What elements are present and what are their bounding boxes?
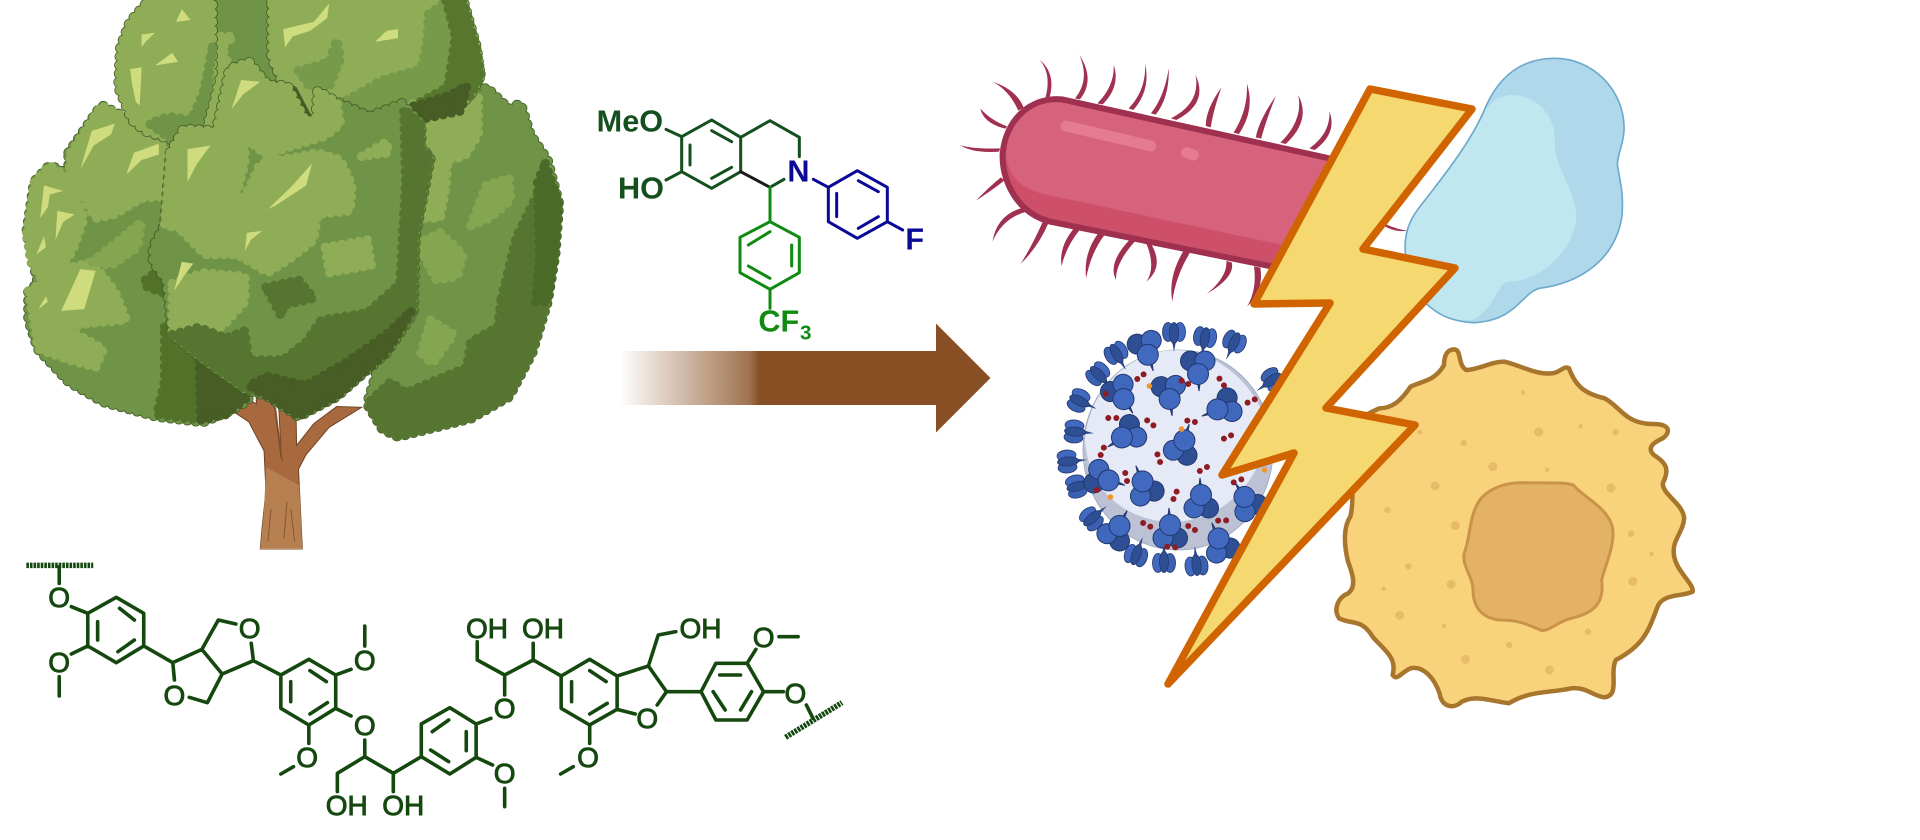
rim spikes <box>1057 322 1287 576</box>
green CF3 phenyl ring: 3 <box>800 321 811 344</box>
lignin atom labels: O <box>785 678 806 709</box>
lignin atom labels: O <box>239 613 260 644</box>
canopy: top middle mass <box>203 0 306 124</box>
chemical structure: lignin polymer <box>26 565 842 821</box>
lignin atom labels: OH <box>382 790 424 821</box>
lignin atom labels: O <box>354 645 376 676</box>
lignin atom labels: O <box>494 693 516 724</box>
lignin atom labels: O <box>296 742 318 773</box>
nucleus <box>1464 483 1613 631</box>
flagella <box>960 55 1408 307</box>
dark green isoquinoline core: HO <box>618 171 664 205</box>
illustration: tree <box>27 0 559 557</box>
blue fluorophenyl ring: F <box>905 222 924 256</box>
illustration: virus <box>1057 322 1287 576</box>
lignin atom labels: OH <box>326 790 368 821</box>
canopy: front mass <box>153 62 431 416</box>
lignin atom labels: O <box>354 710 376 741</box>
lignin atom labels: O <box>494 758 516 789</box>
chemical structure: tetrahydroisoquinoline compound <box>597 105 924 344</box>
illustration: cancer cell <box>1308 349 1693 706</box>
blue fluorophenyl ring: N <box>787 155 809 189</box>
arrow <box>620 324 990 432</box>
lignin atom labels: O <box>636 703 658 734</box>
cell body <box>1003 99 1352 270</box>
green CF3 phenyl ring <box>740 187 811 344</box>
lignin atom labels: O <box>48 647 70 678</box>
virus envelope <box>1083 350 1273 550</box>
illustration: fungal cell <box>1405 58 1624 323</box>
organelles <box>1384 393 1652 670</box>
illustration: bacterium <box>960 55 1408 307</box>
canopy: top left mass <box>119 0 212 140</box>
lignin atom labels: O <box>164 680 185 711</box>
canopy: left mass <box>27 105 249 422</box>
canopy: top right mass <box>272 0 481 122</box>
dark green isoquinoline core <box>597 105 799 205</box>
inner highlight <box>1405 95 1576 320</box>
green CF3 phenyl ring: CF <box>758 305 799 339</box>
cell membrane <box>1308 349 1693 706</box>
blue fluorophenyl ring <box>787 155 924 256</box>
lignin atom labels: OH <box>680 613 722 644</box>
red and orange particles <box>1097 374 1265 547</box>
trunk <box>230 375 362 557</box>
lignin atom labels: O <box>48 582 70 613</box>
lignin atom labels: O <box>577 742 599 773</box>
lightning bolt <box>1168 89 1472 684</box>
lignin atom labels <box>48 582 806 821</box>
lignin atom labels: OH <box>466 613 508 644</box>
lignin atom labels: OH <box>522 613 564 644</box>
surface spikes <box>1081 328 1271 566</box>
lignin bonds <box>26 565 842 807</box>
dark green isoquinoline core: MeO <box>597 105 663 139</box>
lignin atom labels: O <box>753 622 774 653</box>
canopy: right mass <box>367 87 559 436</box>
